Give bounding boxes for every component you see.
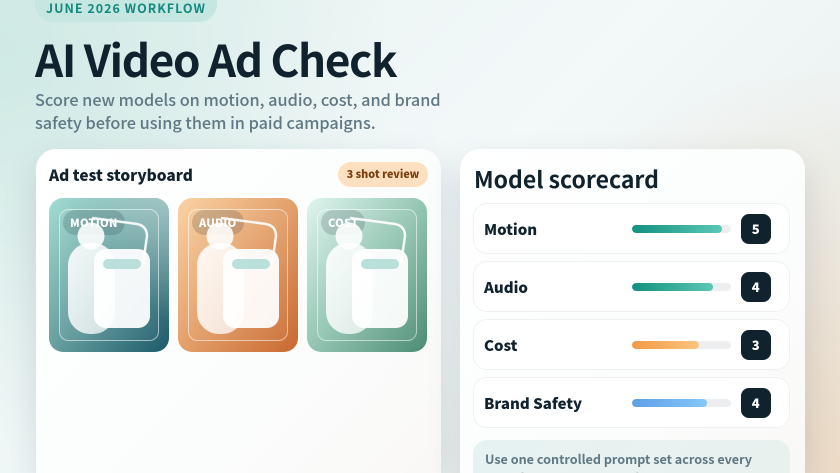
score row: motion [473, 203, 790, 254]
storyboard heading: Ad test storyboard [49, 164, 193, 186]
score row: motion: 5 [752, 218, 760, 238]
panel: scorecard [460, 149, 805, 473]
score row: brand safety: 4 [752, 392, 760, 412]
score row: motion: Motion [484, 219, 537, 240]
storyboard tile: audio: AUDIO [198, 215, 237, 231]
storyboard tile: cost: COST [328, 215, 359, 231]
callout note: Use one controlled prompt set across every [485, 449, 752, 468]
subtitle: Score new models on motion, audio, cost, and brand [35, 87, 441, 111]
title: AI Video Ad Check [35, 26, 396, 90]
shot review badge [338, 162, 428, 187]
subtitle: safety before using them in paid campaigns. [35, 110, 376, 134]
storyboard tile: audio [178, 198, 298, 352]
score row: cost: Cost [484, 335, 517, 356]
shot review badge: 3 shot review [347, 166, 419, 182]
subtitle [35, 87, 441, 134]
storyboard tile: cost [307, 198, 427, 352]
score row: brand safety: Brand Safety [484, 393, 582, 414]
panel: storyboard [36, 149, 441, 473]
score row: cost [473, 319, 790, 370]
callout note [473, 440, 790, 473]
score row: audio: 4 [752, 276, 760, 296]
storyboard tile: motion [49, 198, 169, 352]
scorecard heading: Model scorecard [474, 161, 659, 195]
score row: audio [473, 261, 790, 312]
score row: brand safety [473, 377, 790, 428]
eyebrow pill [35, 0, 217, 22]
score row: cost: 3 [752, 334, 760, 354]
storyboard tile: motion: MOTION [70, 215, 118, 231]
score row: audio: Audio [484, 277, 528, 298]
